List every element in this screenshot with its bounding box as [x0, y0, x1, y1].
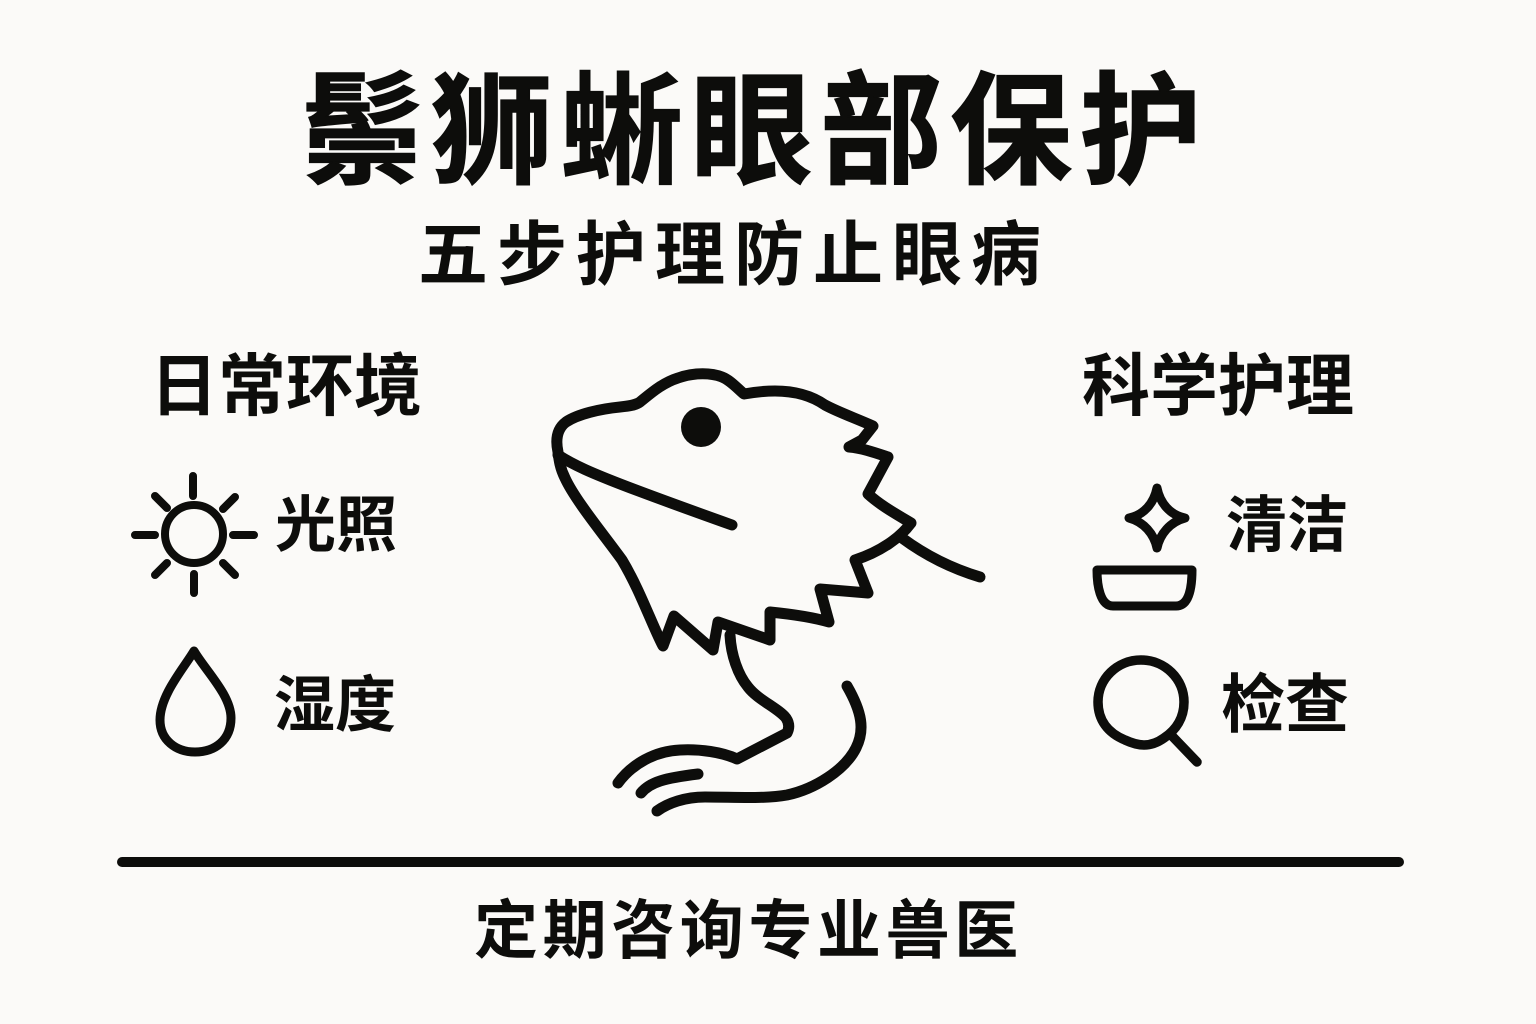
heading: scientific care: 科学护理 [1082, 349, 1354, 425]
icon: water drop [160, 651, 231, 752]
title: 鬃狮蜥眼部保护 [301, 64, 1210, 200]
label: inspection: 检查 [1221, 669, 1349, 741]
dragon mouth line [558, 455, 732, 525]
icon: sun [135, 476, 254, 593]
dragon toe [641, 774, 698, 793]
icon: magnifying glass [1098, 660, 1197, 762]
icon: sparkle over bowl [1097, 488, 1192, 606]
dragon rear spur [902, 538, 980, 577]
dragon front leg [618, 635, 789, 783]
dragon eye [681, 407, 721, 447]
label: humidity: 湿度 [274, 671, 396, 739]
subtitle: 五步护理防止眼病 [418, 216, 1050, 294]
label: cleaning: 清洁 [1226, 491, 1348, 559]
footer text: 定期咨询专业兽医 [474, 895, 1023, 967]
illustration: bearded dragon [557, 374, 980, 811]
dragon head and frill [557, 374, 911, 650]
label: lighting: 光照 [275, 491, 397, 559]
heading: daily environment: 日常环境 [150, 349, 422, 425]
divider line [122, 857, 1399, 867]
dragon tail [657, 686, 861, 811]
